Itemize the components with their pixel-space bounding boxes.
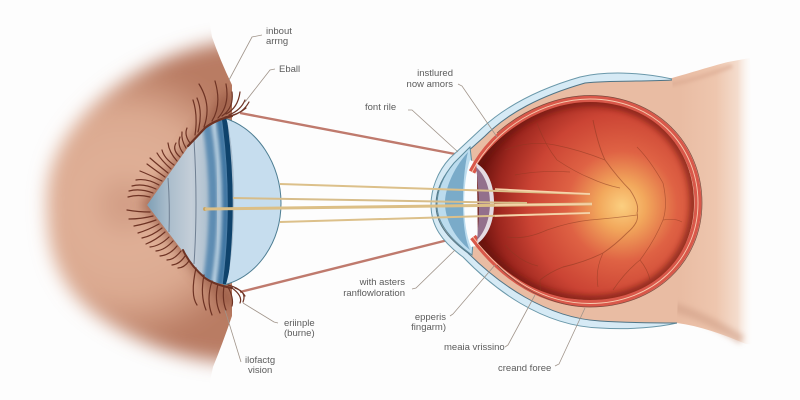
label: instlured now amors: instlured <box>417 68 453 79</box>
fundus edge vignette <box>477 102 694 300</box>
label: instlured now amors: now amors <box>407 79 453 90</box>
label: with asters ranflowloration: with asters <box>360 277 405 288</box>
infographic: eye anatomy diagram <box>35 28 748 374</box>
outer sclera layer <box>431 73 677 329</box>
label: inbout arrng: arrng <box>266 36 288 47</box>
rim highlight <box>472 99 698 304</box>
pupil gap <box>464 160 482 247</box>
retinal veins <box>505 120 682 296</box>
cornea dome <box>224 118 281 285</box>
label: eriinple burne: (burne) <box>284 328 315 339</box>
sclera contour lines <box>431 73 677 329</box>
orbit skin <box>600 58 758 345</box>
eyeball cone <box>147 116 234 286</box>
label: meaia vrissino: meaia vrissino <box>444 342 505 353</box>
label: eriinple burne: eriinple <box>284 318 315 329</box>
rim outer dark edge <box>497 96 702 307</box>
label: epperis fingarm: fingarm) <box>411 322 446 333</box>
inner sclera layer <box>436 80 681 323</box>
upper eyelashes <box>128 81 249 197</box>
orbit skin shading <box>640 66 742 340</box>
ray 2 <box>233 198 527 203</box>
eyelid skin <box>47 42 280 362</box>
light rays through the eye <box>205 184 592 222</box>
leader lines <box>225 35 585 366</box>
anterior chamber <box>437 147 474 255</box>
label: creand foree: creand foree <box>498 363 551 374</box>
label: with asters ranflowloration: ranflowloration <box>343 288 405 299</box>
light rays: left reflected red lines <box>240 113 455 292</box>
panel: left eye side view <box>47 42 455 362</box>
label: inbout arrng: inbout <box>266 26 292 37</box>
ray 1 <box>280 184 590 194</box>
purple iris <box>476 167 490 240</box>
label: Eball: Eball <box>279 64 300 75</box>
inner contour lines <box>168 140 196 264</box>
lower eyelashes <box>127 210 245 315</box>
ray 3 <box>205 204 592 209</box>
ray highlights inside retina <box>495 189 592 216</box>
main light ray start cap <box>203 207 207 211</box>
label: ilofactg vision: ilofactg <box>245 355 275 366</box>
label: epperis fingarm: epperis <box>415 312 446 323</box>
red retinal rim <box>472 99 698 304</box>
ray 4 <box>280 213 590 222</box>
panel: right eyeball cross-section <box>431 58 758 345</box>
aqueous dark crescent <box>445 152 470 250</box>
retina fundus <box>477 102 694 300</box>
label: font rile: font rile <box>365 102 396 113</box>
iris and lens crescent <box>476 163 494 244</box>
label: ilofactg vision: vision <box>248 365 272 376</box>
